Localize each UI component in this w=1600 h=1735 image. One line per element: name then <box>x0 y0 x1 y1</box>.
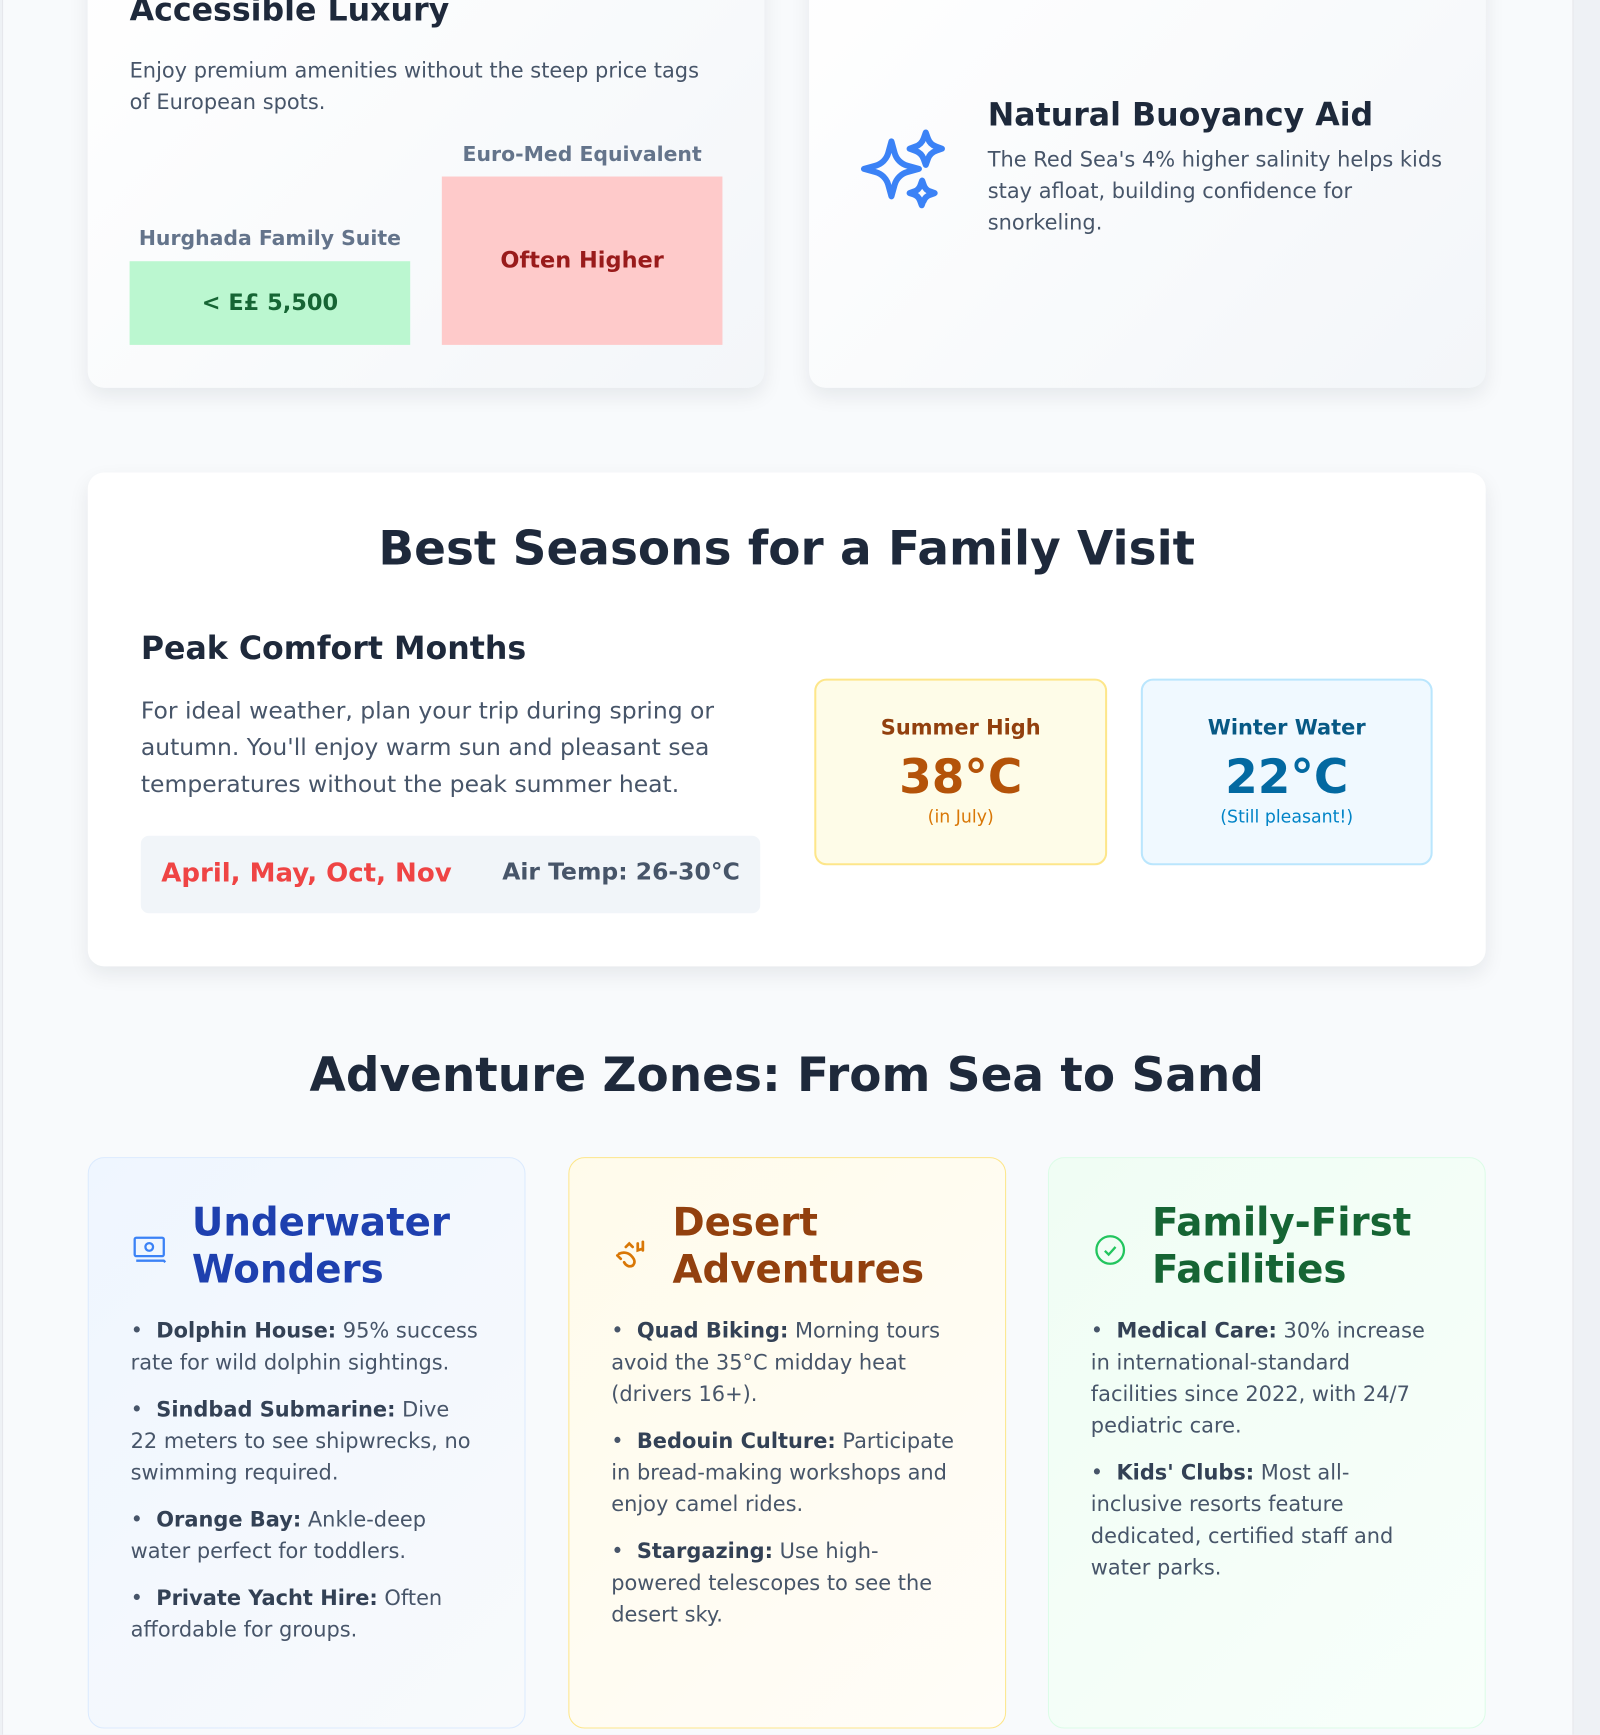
heading: best seasons: Best Seasons for a Family Visit <box>378 520 1195 576</box>
icon: camel <box>616 1240 644 1268</box>
bar: hurghada price <box>130 261 410 345</box>
list: facilities: • Kids' Clubs: Most all-inclusive resorts feature dedicated, certified staff and water parks. <box>1091 1460 1393 1580</box>
stat: winter water: (Still pleasant!) <box>1220 807 1353 828</box>
panel: best seasons <box>88 472 1486 966</box>
callout: months bar: Air Temp: 26-30°C <box>502 859 740 886</box>
stat: winter water: 22°C <box>1225 749 1348 804</box>
list: underwater activities: • Dolphin House: 95% success rate for wild dolphin sightings. <box>131 1318 478 1374</box>
bar: euro-med price <box>442 177 722 345</box>
label: hurghada: Hurghada Family Suite <box>139 226 401 250</box>
stat: summer high <box>814 679 1107 865</box>
icon: camera <box>134 1236 166 1263</box>
list: underwater activities: • Orange Bay: Ankle-deep water perfect for toddlers. <box>131 1507 426 1563</box>
panel: underwater wonders <box>88 1157 526 1729</box>
text: buoyancy description: The Red Sea's 4% higher salinity helps kids stay afloat, building confidence for snorkeling. <box>988 147 1442 235</box>
text: luxury description: Enjoy premium amenities without the steep price tags of European spots. <box>130 58 699 114</box>
stat: summer high: 38°C <box>899 749 1022 804</box>
list: facilities <box>1091 1318 1425 1580</box>
list: underwater activities: • Private Yacht Hire: Often affordable for groups. <box>131 1586 442 1642</box>
heading: buoyancy: Natural Buoyancy Aid <box>988 97 1373 134</box>
list: underwater activities: 22 meters to see shipwrecks, no swimming required. <box>131 1429 471 1485</box>
bar: euro-med price: Often Higher <box>500 248 664 273</box>
heading: adventure zones: Adventure Zones: From Sea to Sand <box>310 1047 1264 1102</box>
card: accessible luxury <box>88 0 764 388</box>
list: desert activities <box>611 1318 954 1627</box>
bar: hurghada price: < E£ 5,500 <box>202 290 338 316</box>
heading: peak comfort: Peak Comfort Months <box>141 631 526 667</box>
heading: desert: Desert Adventures <box>672 1200 924 1292</box>
icon: sparkles <box>860 130 945 208</box>
callout: months bar <box>141 836 760 913</box>
icon: check circle <box>1095 1235 1126 1265</box>
heading: underwater: Underwater Wonders <box>192 1200 450 1292</box>
heading: family-first: Family-First Facilities <box>1152 1200 1411 1292</box>
text: peak description: For ideal weather, plan your trip during spring or autumn. You'll enjoy warm sun and pleasant sea temperatures without the peak summer heat. <box>141 698 714 798</box>
list: underwater activities <box>131 1318 478 1642</box>
list: desert activities: • Quad Biking: Morning tours avoid the 35°C midday heat (drivers 16+). <box>611 1318 940 1406</box>
card: natural buoyancy <box>809 0 1486 388</box>
callout: months bar: April, May, Oct, Nov <box>161 858 452 889</box>
panel: desert adventures <box>568 1157 1006 1729</box>
stat: winter water <box>1141 679 1433 865</box>
stat: summer high: Summer High <box>881 715 1041 740</box>
list: desert activities: • Stargazing: Use high-powered telescopes to see the desert sky. <box>611 1539 932 1627</box>
label: euro-med: Euro-Med Equivalent <box>463 142 702 166</box>
list: facilities: • Medical Care: 30% increase in international-standard facilities since 2022, with 24/7 pediatric care. <box>1091 1318 1425 1438</box>
stat: winter water: Winter Water <box>1208 715 1366 740</box>
list: desert activities: • Bedouin Culture: Participate in bread-making workshops and enjoy camel rides. <box>611 1429 954 1516</box>
stat: summer high: (in July) <box>928 807 994 828</box>
panel: family-first facilities <box>1048 1157 1486 1729</box>
list: underwater activities: • Sindbad Submarine: Dive <box>131 1397 449 1421</box>
